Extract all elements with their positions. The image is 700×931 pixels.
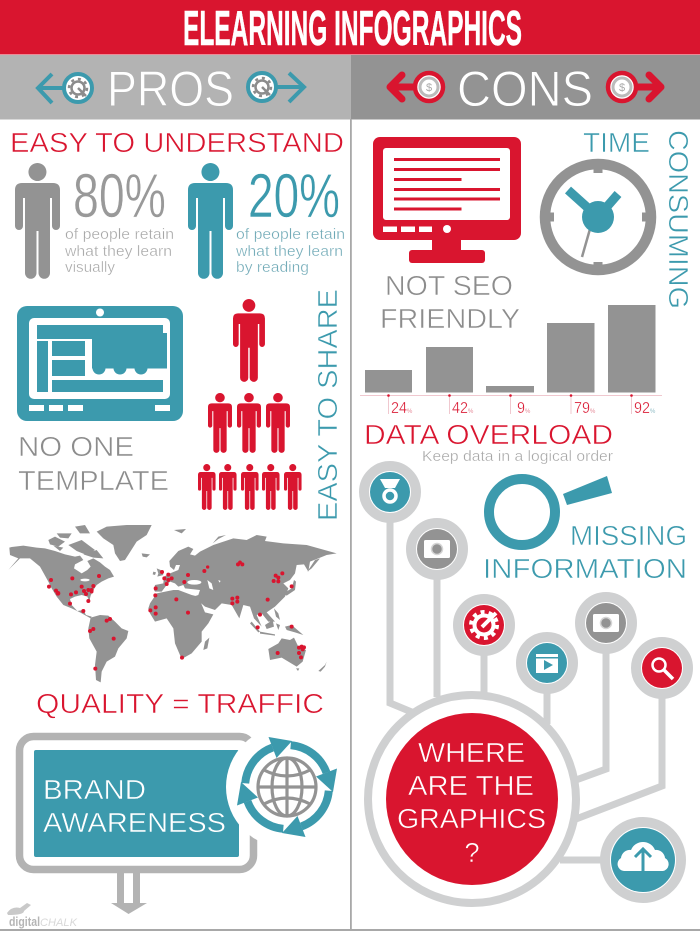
cons header: CONS [457,61,593,117]
signpost: brand awareness [20,736,254,914]
bar chart [360,305,662,417]
hub: where are the graphics: ARE THE [408,770,534,801]
hub: where are the graphics [368,695,576,903]
icon: magnifying glass [489,476,612,545]
stat: 80 percent visual: what they learn [64,244,172,260]
stat: 80 percent visual: 80% [73,162,166,231]
bar chart: 9 [517,400,525,417]
icon: sharing pyramid of people [198,299,302,510]
pros header [0,55,351,120]
stat: 20 percent reading: of people retain [236,227,345,243]
stat: 20 percent reading: by reading [236,260,309,276]
bar chart: % [650,409,656,415]
signpost: brand awareness: BRAND [43,774,146,805]
bar chart: 79 [574,400,590,417]
cons header: $ [426,82,432,94]
icon: tablet with template [17,306,183,421]
bar chart: % [468,409,474,415]
logo: digitalchalk: digital [9,914,40,929]
text: not seo friendly [380,270,520,334]
node: gear and wrench [458,599,510,651]
text: missing information [483,520,687,584]
hub: where are the graphics: ? [464,837,480,868]
hub: where are the graphics: WHERE [418,737,525,768]
text: missing information: MISSING [570,520,687,551]
cons header [351,55,700,120]
logo: digitalchalk [7,903,78,929]
stat: 80 percent visual: visually [65,260,116,276]
connector lines [390,520,662,860]
world map [8,525,337,682]
text: consuming: CONSUMING [663,130,694,309]
stat: 20 percent reading [188,162,345,279]
text: not seo friendly: NOT SEO [385,270,513,301]
stat: 20 percent reading: what they learn [235,244,343,260]
text: easy to share: EASY TO SHARE [312,289,343,521]
stat: 80 percent visual [15,162,174,279]
hub: where are the graphics: GRAPHICS [397,803,546,834]
heading: data overload: DATA OVERLOAD [364,419,613,450]
pros header: PROS [107,61,234,117]
icon: globe with cycling arrows [226,726,348,848]
node: cloud upload [605,822,681,898]
text: no one template [18,431,169,496]
node: camera right [580,597,632,649]
text: keep data in a logical order: Keep data in a logical order [422,449,613,465]
signpost: brand awareness: AWARENESS [43,807,226,838]
node: video player [521,637,573,689]
text: time: TIME [583,127,650,158]
bar chart: % [525,409,531,415]
logo: digitalchalk: CHALK [40,917,78,929]
bar chart: 42 [452,400,468,417]
cons header: $ [619,82,625,94]
bar chart: 92 [634,400,650,417]
node: medal [364,466,416,518]
heading: easy to understand: EASY TO UNDERSTAND [10,127,344,158]
text: no one template: NO ONE [18,431,134,462]
text: quality equals traffic: QUALITY = TRAFFIC [36,688,324,719]
stat: 80 percent visual: of people retain [65,227,174,243]
text: no one template: TEMPLATE [18,465,169,496]
icon: clock [545,164,651,270]
node: camera top [411,523,463,575]
node: search [636,642,688,694]
bar chart: 24 [391,400,407,417]
text: missing information: INFORMATION [483,553,687,584]
bar chart: % [590,409,596,415]
stat: 20 percent reading: 20% [248,162,340,231]
icon: monitor with text lines [373,137,521,263]
text: not seo friendly: FRIENDLY [380,303,520,334]
bar chart: % [407,409,413,415]
